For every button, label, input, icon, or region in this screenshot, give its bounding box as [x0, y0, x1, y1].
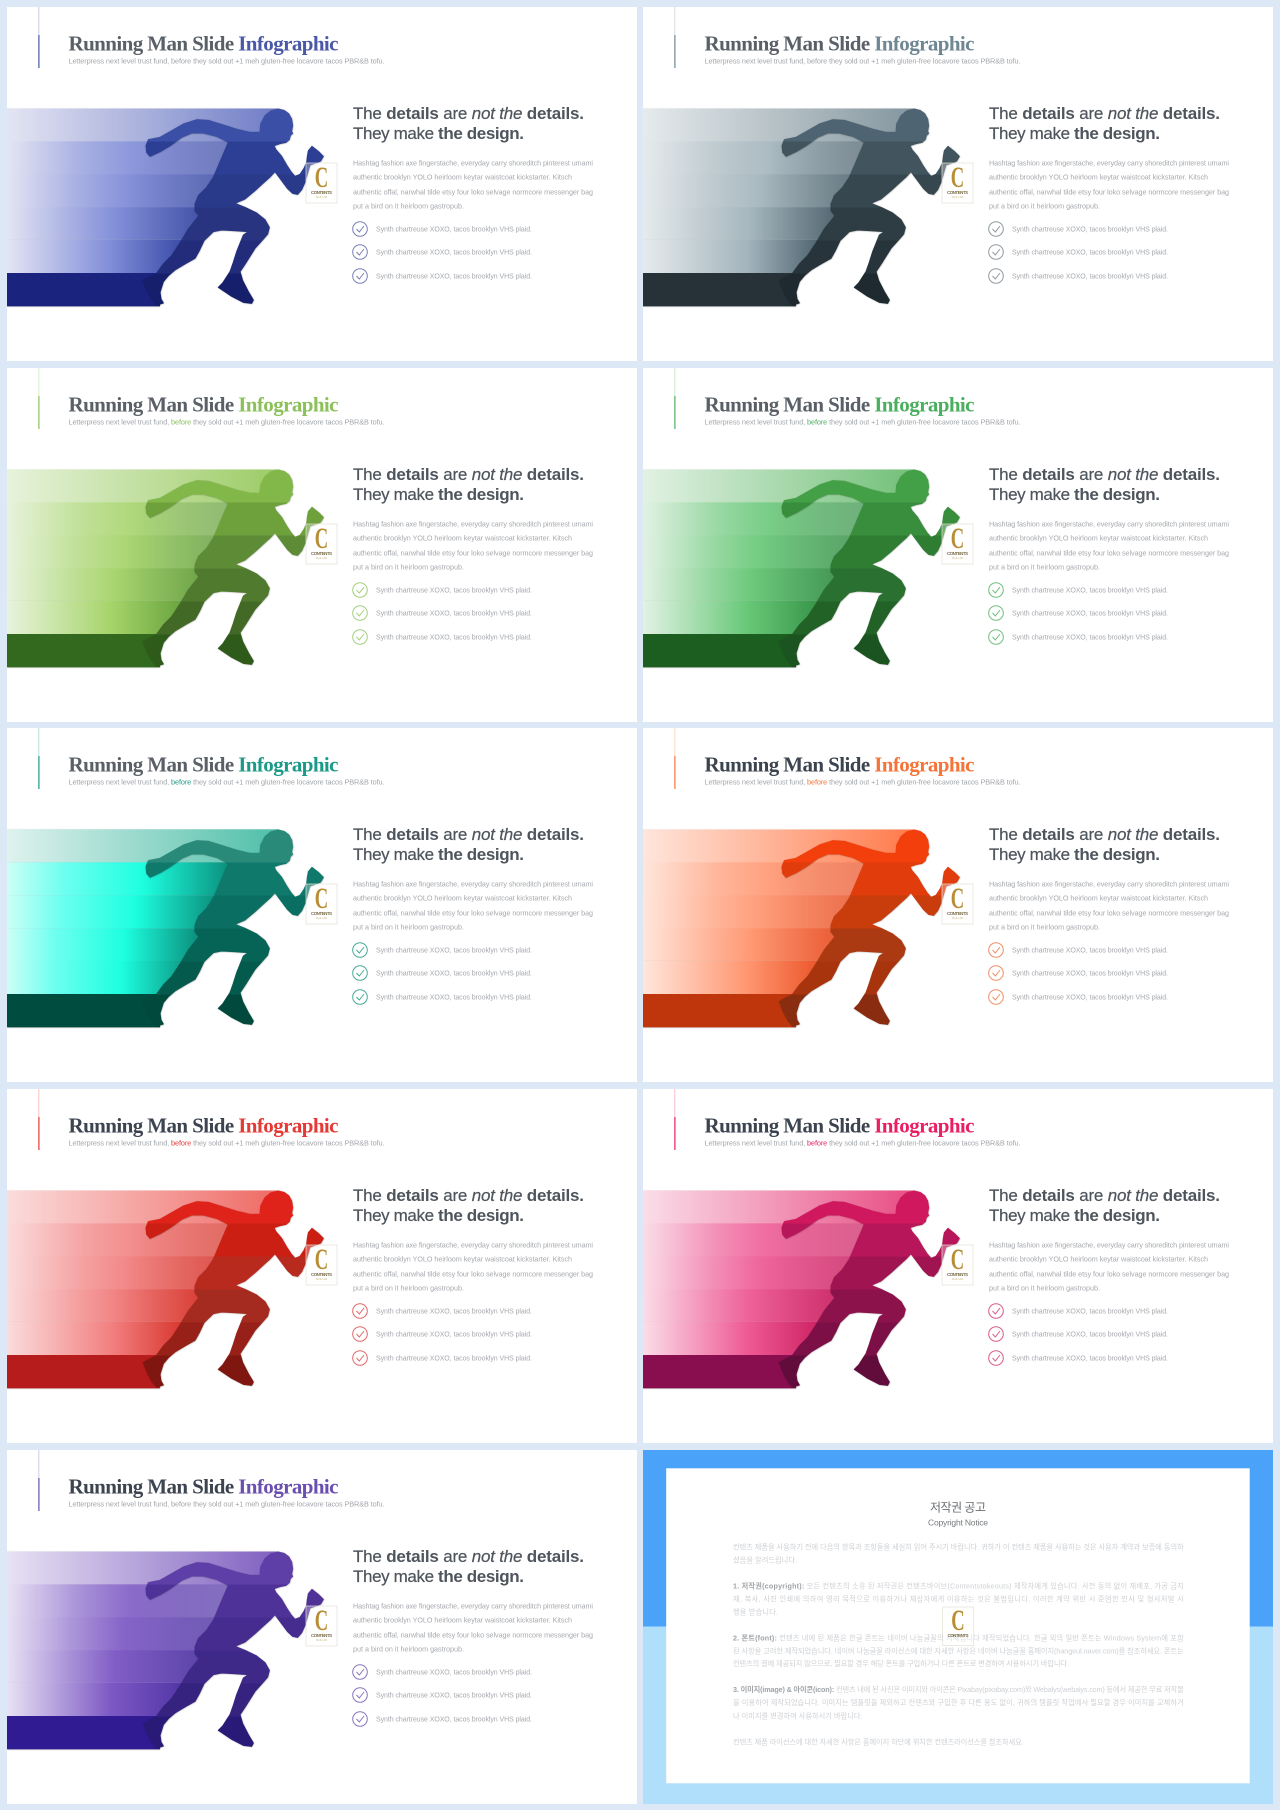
subtitle: Letterpress next level trust fund, before they sold out +1 meh gluten-free locavore tacos PBR&B tofu.: [68, 56, 384, 65]
body paragraph: Hashtag fashion axe fingerstache, everyday carry shoreditch pinterest umami: [353, 1601, 593, 1610]
notice body: 된 사항을 고려한 제작되었습니다. 네이버 나눔글꼴 라이선스에 대한 자세한 사항은 네이버 나눔글꼴 홈페이지(hangeul.naver.com)를 참조하세요. 폰트는: [733, 1646, 1184, 1655]
subtitle: Letterpress next level trust fund, before they sold out +1 meh gluten-free locavore tacos PBR&B tofu.: [68, 417, 384, 426]
body paragraph: authentic offal, narwhal tilde etsy four loko selvage normcore messenger bag: [989, 909, 1229, 918]
accent line: [38, 1089, 40, 1150]
subtitle: Letterpress next level trust fund, before they sold out +1 meh gluten-free locavore tacos PBR&B tofu.: [68, 778, 384, 787]
subtitle: Letterpress next level trust fund, before they sold out +1 meh gluten-free locavore tacos PBR&B tofu.: [705, 56, 1021, 65]
check list: Synth chartreuse XOXO, tacos brooklyn VHS plaid.: [376, 1716, 532, 1723]
panel: slide 3 lime: [7, 368, 637, 722]
check list: [353, 943, 532, 1005]
body paragraph: Hashtag fashion axe fingerstache, everyday carry shoreditch pinterest umami: [353, 880, 593, 889]
subtitle: Letterpress next level trust fund, before they sold out +1 meh gluten-free locavore tacos PBR&B tofu.: [68, 1499, 384, 1508]
panel: slide 2 slate: [643, 7, 1273, 361]
notice title: [928, 1500, 989, 1527]
heading: The details are not the details.: [353, 1547, 584, 1566]
heading: The details are not the details.: [989, 104, 1220, 123]
watermark logo: [942, 522, 973, 564]
heading: [989, 1186, 1220, 1225]
watermark logo: MAIL LAB: [952, 1277, 964, 1281]
heading: They make the design.: [989, 124, 1160, 143]
check list: Synth chartreuse XOXO, tacos brooklyn VHS plaid.: [1012, 249, 1168, 256]
body paragraph: put a bird on it heirloom gastropub.: [989, 923, 1100, 932]
body paragraph: put a bird on it heirloom gastropub.: [353, 201, 464, 210]
title: Running Man Slide Infographic: [68, 1474, 338, 1498]
body paragraph: [353, 158, 593, 210]
watermark logo: C: [951, 162, 965, 194]
check list: [989, 1304, 1168, 1365]
heading: They make the design.: [353, 845, 524, 864]
watermark logo: CONTENTS: [311, 911, 332, 916]
check list: Synth chartreuse XOXO, tacos brooklyn VHS plaid.: [1012, 634, 1168, 641]
check list: Synth chartreuse XOXO, tacos brooklyn VHS plaid.: [1012, 948, 1168, 955]
heading: [989, 465, 1220, 504]
body paragraph: authentic brooklyn YOLO heirloom keytar waistcoat kickstarter. Kitsch: [353, 894, 572, 903]
check list: Synth chartreuse XOXO, tacos brooklyn VHS plaid.: [1012, 273, 1168, 280]
body paragraph: Hashtag fashion axe fingerstache, everyday carry shoreditch pinterest umami: [989, 519, 1230, 528]
body paragraph: put a bird on it heirloom gastropub.: [353, 1644, 464, 1653]
watermark logo: MAIL LAB: [952, 195, 964, 199]
body paragraph: put a bird on it heirloom gastropub.: [353, 1283, 464, 1292]
body paragraph: [989, 1240, 1230, 1292]
check list: Synth chartreuse XOXO, tacos brooklyn VHS plaid.: [376, 1669, 532, 1676]
watermark logo: C: [315, 162, 328, 194]
accent line: [38, 368, 40, 429]
watermark logo: C: [315, 1244, 328, 1276]
watermark logo: [306, 522, 337, 564]
accent line: [675, 7, 676, 68]
body paragraph: authentic offal, narwhal tilde etsy four loko selvage normcore messenger bag: [353, 1630, 593, 1639]
heading: [353, 825, 584, 864]
subtitle: Letterpress next level trust fund, before they sold out +1 meh gluten-free locavore tacos PBR&B tofu.: [705, 1138, 1021, 1147]
watermark logo: CONTENTS: [948, 1633, 969, 1638]
white card: [666, 1468, 1250, 1783]
notice body: 을 이용하여 제작되었습니다. 이미지는 템플릿을 제외하고 컨텐츠와 구입한 후 다른 용도 없이, 귀하의 템플릿 작업에서 필요할 경우 이미지를 교체하거: [733, 1698, 1184, 1707]
body paragraph: authentic brooklyn YOLO heirloom keytar waistcoat kickstarter. Kitsch: [353, 1615, 572, 1624]
icon: running man: [143, 470, 323, 666]
title: Running Man Slide Infographic: [68, 392, 338, 416]
notice body: 재, 복사, 사진 인쇄에 의하여 영리 목적으로 이용하거나 제삼자에게 이용하는 것은 불법입니다. 이러한 계약 위반 시 준엄한 민사 및 형사처벌 시: [733, 1594, 1184, 1603]
watermark logo: C: [315, 883, 328, 916]
check list: Synth chartreuse XOXO, tacos brooklyn VHS plaid.: [1012, 995, 1168, 1002]
title: Running Man Slide Infographic: [68, 32, 338, 56]
icon: running man: [143, 830, 323, 1026]
check list: [353, 582, 532, 644]
body paragraph: put a bird on it heirloom gastropub.: [353, 562, 464, 571]
check list: Synth chartreuse XOXO, tacos brooklyn VHS plaid.: [1012, 971, 1168, 978]
heading: The details are not the details.: [353, 1186, 584, 1205]
heading: The details are not the details.: [989, 465, 1220, 484]
body paragraph: authentic brooklyn YOLO heirloom keytar waistcoat kickstarter. Kitsch: [353, 533, 572, 542]
notice title: Copyright Notice: [928, 1517, 989, 1527]
heading: They make the design.: [353, 1206, 524, 1225]
body paragraph: [989, 519, 1230, 571]
heading: [353, 104, 584, 143]
notice body: 2. 폰트(font): 컨텐츠 내에 된 제품은 한글 폰트는 네이버 나눔글꼴의 서체입니다 제작되었습니다. 한글 외의 일반 폰트는 Windows System에 포함: [733, 1633, 1184, 1642]
check list: [989, 943, 1168, 1005]
notice body: 1. 저작권(copyright): 모든 컨텐츠의 소유 된 저작권은 컨텐츠바이브(Contentstokeouts) 제작자에게 있습니다. 사전 동의 없이 재배포, 가공 금지: [733, 1581, 1184, 1590]
panel: slide 1 blue: [7, 7, 637, 361]
body paragraph: authentic brooklyn YOLO heirloom keytar waistcoat kickstarter. Kitsch: [989, 894, 1208, 903]
check list: Synth chartreuse XOXO, tacos brooklyn VHS plaid.: [376, 226, 532, 233]
watermark logo: MAIL LAB: [316, 916, 327, 920]
icon: running man: [143, 1552, 323, 1748]
check list: Synth chartreuse XOXO, tacos brooklyn VHS plaid.: [376, 971, 532, 978]
motion bands: [643, 469, 915, 667]
watermark logo: [306, 1604, 337, 1646]
watermark logo: CONTENTS: [947, 1272, 968, 1277]
check list: Synth chartreuse XOXO, tacos brooklyn VHS plaid.: [376, 610, 532, 617]
notice body: 셨음을 알려드립니다.: [733, 1555, 797, 1564]
heading: [989, 825, 1220, 864]
watermark logo: CONTENTS: [947, 911, 968, 916]
body paragraph: put a bird on it heirloom gastropub.: [353, 923, 464, 932]
check list: Synth chartreuse XOXO, tacos brooklyn VHS plaid.: [376, 634, 532, 641]
body paragraph: authentic offal, narwhal tilde etsy four loko selvage normcore messenger bag: [353, 909, 593, 918]
check list: Synth chartreuse XOXO, tacos brooklyn VHS plaid.: [376, 1308, 532, 1315]
panel: slide 8 pink: [643, 1089, 1273, 1443]
watermark logo: MAIL LAB: [952, 556, 964, 560]
panel: copyright notice slide: [643, 1450, 1273, 1804]
body paragraph: authentic offal, narwhal tilde etsy four loko selvage normcore messenger bag: [353, 548, 593, 557]
body paragraph: Hashtag fashion axe fingerstache, everyday carry shoreditch pinterest umami: [353, 519, 593, 528]
check list: Synth chartreuse XOXO, tacos brooklyn VHS plaid.: [1012, 1331, 1168, 1338]
check list: Synth chartreuse XOXO, tacos brooklyn VHS plaid.: [1012, 610, 1168, 617]
subtitle: Letterpress next level trust fund, before they sold out +1 meh gluten-free locavore tacos PBR&B tofu.: [705, 417, 1021, 426]
body paragraph: authentic offal, narwhal tilde etsy four loko selvage normcore messenger bag: [989, 187, 1229, 196]
body paragraph: Hashtag fashion axe fingerstache, everyday carry shoreditch pinterest umami: [353, 1240, 593, 1249]
notice body: 컨텐츠 제품 라이선스에 대한 자세한 사항은 홈페이지 하단에 위치한 컨텐츠라이선스를 참조하세요.: [733, 1737, 1024, 1746]
title: Running Man Slide Infographic: [705, 32, 975, 56]
motion bands: [7, 1551, 279, 1749]
watermark logo: MAIL LAB: [316, 195, 327, 199]
motion bands: [643, 108, 915, 306]
icon: running man: [780, 470, 960, 666]
watermark logo: CONTENTS: [311, 551, 332, 556]
watermark logo: C: [315, 522, 328, 555]
watermark logo: C: [315, 1604, 328, 1637]
watermark logo: CONTENTS: [947, 190, 968, 195]
watermark logo: [306, 883, 337, 924]
watermark logo: [942, 162, 973, 203]
icon: running man: [780, 830, 960, 1026]
icon: running man: [143, 1191, 323, 1387]
motion bands: [7, 469, 279, 667]
check list: [353, 222, 532, 283]
notice body: 나 이미지를 변경하여 사용하시기 바랍니다.: [733, 1711, 863, 1720]
watermark logo: CONTENTS: [311, 1633, 332, 1638]
accent line: [38, 1450, 40, 1511]
heading: They make the design.: [353, 1567, 524, 1586]
heading: They make the design.: [989, 845, 1160, 864]
heading: [989, 104, 1220, 143]
body paragraph: Hashtag fashion axe fingerstache, everyday carry shoreditch pinterest umami: [353, 158, 593, 167]
body paragraph: put a bird on it heirloom gastropub.: [989, 1283, 1100, 1292]
watermark logo: C: [951, 522, 965, 555]
check list: Synth chartreuse XOXO, tacos brooklyn VHS plaid.: [376, 1692, 532, 1699]
heading: They make the design.: [989, 485, 1160, 504]
check list: Synth chartreuse XOXO, tacos brooklyn VHS plaid.: [376, 948, 532, 955]
icon: running man: [143, 109, 323, 305]
body paragraph: authentic offal, narwhal tilde etsy four loko selvage normcore messenger bag: [353, 1269, 593, 1278]
check list: Synth chartreuse XOXO, tacos brooklyn VHS plaid.: [1012, 1308, 1168, 1315]
notice body: 컨텐츠의 결에 제공되지 않으므로, 필요할 경우 해당 폰트를 구입하거나 다른 폰트로 변경하여 사용하시기 바랍니다.: [733, 1659, 1069, 1668]
heading: The details are not the details.: [989, 825, 1220, 844]
motion bands: [7, 1190, 279, 1388]
check list: Synth chartreuse XOXO, tacos brooklyn VHS plaid.: [376, 1331, 532, 1338]
body paragraph: [353, 519, 593, 571]
body paragraph: Hashtag fashion axe fingerstache, everyday carry shoreditch pinterest umami: [989, 1240, 1230, 1249]
body paragraph: [353, 1240, 593, 1292]
watermark logo: C: [952, 1604, 965, 1637]
body paragraph: authentic offal, narwhal tilde etsy four loko selvage normcore messenger bag: [989, 1269, 1229, 1278]
title: Running Man Slide Infographic: [705, 1114, 975, 1138]
body paragraph: put a bird on it heirloom gastropub.: [989, 201, 1100, 210]
panel: slide 4 green: [643, 368, 1273, 722]
motion bands: [643, 1190, 915, 1388]
check list: Synth chartreuse XOXO, tacos brooklyn VHS plaid.: [1012, 226, 1168, 233]
body paragraph: authentic brooklyn YOLO heirloom keytar waistcoat kickstarter. Kitsch: [989, 172, 1208, 181]
body paragraph: Hashtag fashion axe fingerstache, everyday carry shoreditch pinterest umami: [989, 158, 1230, 167]
watermark logo: C: [951, 883, 965, 916]
heading: They make the design.: [989, 1206, 1160, 1225]
watermark logo: [306, 162, 337, 203]
accent line: [675, 728, 676, 789]
notice body: 행을 받습니다.: [733, 1607, 778, 1616]
accent line: [675, 1089, 676, 1150]
check list: Synth chartreuse XOXO, tacos brooklyn VHS plaid.: [376, 273, 532, 280]
body paragraph: [989, 158, 1230, 210]
watermark logo: [942, 883, 973, 924]
body paragraph: [353, 880, 593, 932]
check list: [353, 1664, 532, 1726]
check list: [353, 1304, 532, 1365]
motion bands: [7, 108, 279, 306]
check list: Synth chartreuse XOXO, tacos brooklyn VHS plaid.: [1012, 587, 1168, 594]
heading: They make the design.: [353, 485, 524, 504]
title: Running Man Slide Infographic: [705, 392, 975, 416]
watermark logo: [942, 1244, 973, 1285]
check list: Synth chartreuse XOXO, tacos brooklyn VHS plaid.: [376, 995, 532, 1002]
subtitle: Letterpress next level trust fund, before they sold out +1 meh gluten-free locavore tacos PBR&B tofu.: [68, 1138, 384, 1147]
accent line: [38, 728, 40, 789]
body paragraph: Hashtag fashion axe fingerstache, everyday carry shoreditch pinterest umami: [989, 880, 1230, 889]
title: Running Man Slide Infographic: [68, 753, 338, 777]
body paragraph: [353, 1601, 593, 1653]
title: Running Man Slide Infographic: [705, 753, 975, 777]
icon: running man: [780, 109, 960, 305]
check list: Synth chartreuse XOXO, tacos brooklyn VHS plaid.: [376, 1355, 532, 1362]
panel: slide 6 orange: [643, 728, 1273, 1082]
body paragraph: authentic brooklyn YOLO heirloom keytar waistcoat kickstarter. Kitsch: [989, 533, 1208, 542]
heading: [353, 1547, 584, 1586]
heading: They make the design.: [353, 124, 524, 143]
motion bands: [7, 830, 279, 1028]
body paragraph: authentic offal, narwhal tilde etsy four loko selvage normcore messenger bag: [353, 187, 593, 196]
watermark logo: [306, 1244, 337, 1285]
body paragraph: put a bird on it heirloom gastropub.: [989, 562, 1100, 571]
motion bands: [643, 830, 915, 1028]
heading: The details are not the details.: [353, 465, 584, 484]
icon: running man: [780, 1191, 960, 1387]
heading: The details are not the details.: [353, 825, 584, 844]
body paragraph: authentic brooklyn YOLO heirloom keytar waistcoat kickstarter. Kitsch: [353, 1254, 572, 1263]
body paragraph: authentic offal, narwhal tilde etsy four loko selvage normcore messenger bag: [989, 548, 1229, 557]
notice body: 3. 이미지(image) & 아이콘(icon): 컨텐츠 내에 된 사진은 이미지와 아이콘은 Pixabay(pixabay.com)와 Webalys(webalys.com) 등에서 제공한 무료 저작물: [733, 1685, 1184, 1694]
blue top background: [643, 1450, 1273, 1626]
watermark logo: CONTENTS: [947, 551, 968, 556]
watermark logo: CONTENTS: [311, 1272, 332, 1277]
accent line: [38, 7, 40, 68]
heading: The details are not the details.: [353, 104, 584, 123]
panel: slide 5 teal: [7, 728, 637, 1082]
subtitle: Letterpress next level trust fund, before they sold out +1 meh gluten-free locavore tacos PBR&B tofu.: [705, 778, 1021, 787]
check list: Synth chartreuse XOXO, tacos brooklyn VHS plaid.: [376, 587, 532, 594]
watermark logo: MAIL LAB: [316, 1638, 327, 1642]
notice body: 컨텐츠 제품을 사용하기 전에 다음의 항목과 조항들을 세심히 읽어 주시기 바랍니다. 귀하가 이 컨텐츠 제품을 사용하는 것은 사용자 계약과 보증에 동의하: [733, 1542, 1184, 1551]
panel: slide 9 purple: [7, 1450, 637, 1804]
check list: [989, 222, 1168, 283]
watermark logo: MAIL LAB: [316, 1277, 327, 1281]
notice title: 저작권 공고: [930, 1500, 986, 1514]
heading: [353, 1186, 584, 1225]
body paragraph: authentic brooklyn YOLO heirloom keytar waistcoat kickstarter. Kitsch: [989, 1254, 1208, 1263]
accent line: [675, 368, 676, 429]
body paragraph: [989, 880, 1230, 932]
watermark logo: MAIL LAB: [952, 916, 964, 920]
check list: Synth chartreuse XOXO, tacos brooklyn VHS plaid.: [376, 249, 532, 256]
watermark logo: CONTENTS: [311, 190, 332, 195]
title: Running Man Slide Infographic: [68, 1114, 338, 1138]
check list: [989, 582, 1168, 644]
watermark logo: C: [951, 1244, 965, 1276]
watermark logo: MAIL LAB: [316, 556, 327, 560]
watermark logo: [943, 1604, 974, 1645]
check list: Synth chartreuse XOXO, tacos brooklyn VHS plaid.: [1012, 1355, 1168, 1362]
body paragraph: authentic brooklyn YOLO heirloom keytar waistcoat kickstarter. Kitsch: [353, 172, 572, 181]
notice body: [733, 1542, 1184, 1746]
heading: The details are not the details.: [989, 1186, 1220, 1205]
heading: [353, 465, 584, 504]
panel: slide 7 red: [7, 1089, 637, 1443]
